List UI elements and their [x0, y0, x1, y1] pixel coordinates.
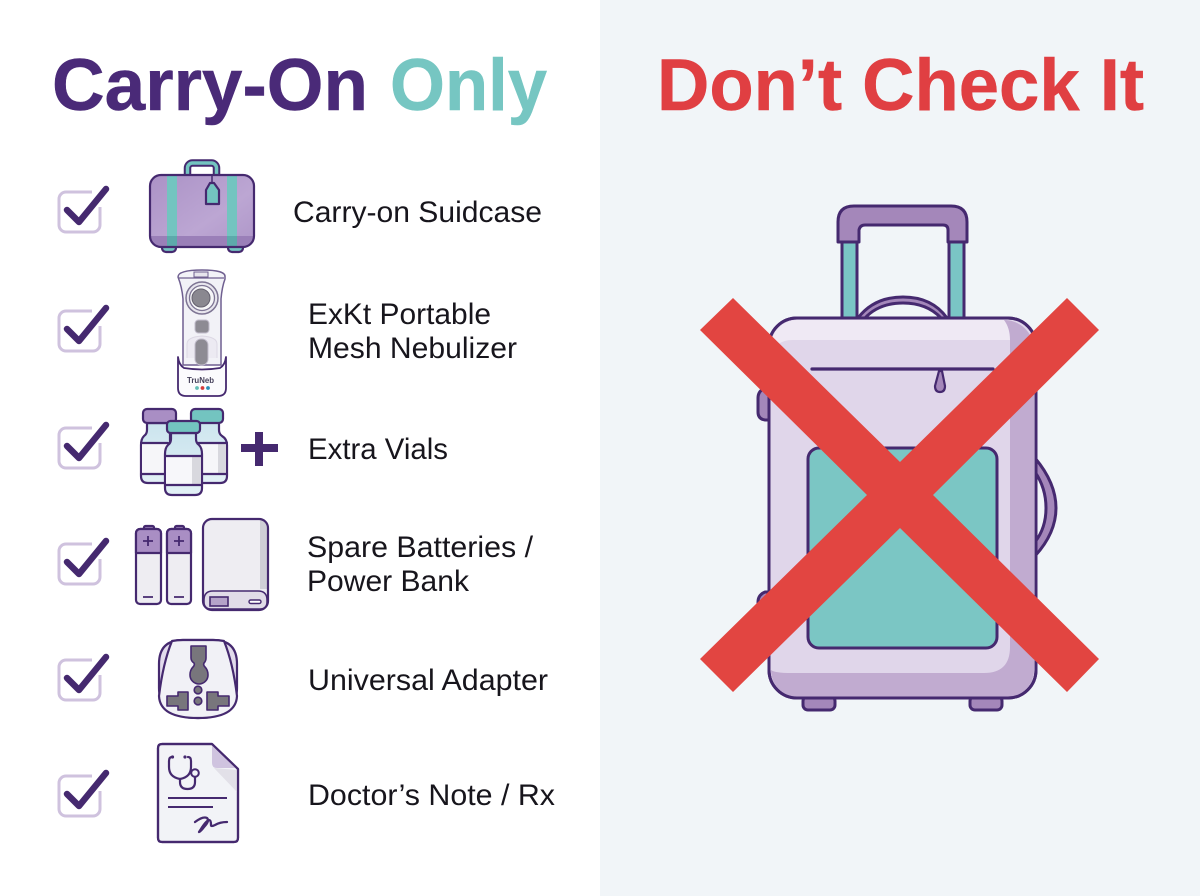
side grip [1035, 458, 1056, 556]
icon: batteries [136, 526, 191, 604]
checkbox 6 [59, 773, 106, 816]
wheels [803, 696, 835, 710]
icon: doctor's note [158, 744, 238, 842]
heading: carry-on only [52, 45, 547, 126]
label: doctor's note / rx: Doctor’s Note / Rx [308, 779, 555, 812]
label: spare batteries / power bank [307, 531, 534, 598]
icon: portable mesh nebulizer [178, 270, 226, 396]
telescoping handle [838, 206, 967, 320]
heading: don't check it: Don’t Check It [657, 45, 1144, 126]
red cross [700, 298, 1099, 692]
checkbox 4 [59, 541, 106, 584]
teal pocket [808, 448, 997, 648]
checkbox 5 [59, 657, 106, 700]
icon: suitcase [150, 163, 254, 252]
label: spare batteries / power bank: Spare Batteries / [307, 531, 534, 564]
heading: carry-on only: Carry-On [52, 45, 368, 126]
side bumpers [758, 388, 770, 420]
label: portable mesh nebulizer: Mesh Nebulizer [308, 332, 517, 365]
zipper [812, 369, 993, 392]
checkbox 3 [59, 425, 106, 468]
label: extra vials: Extra Vials [308, 433, 448, 466]
icon: universal adapter [159, 640, 237, 718]
label: carry-on suitcase: Carry-on Suidcase [293, 196, 542, 229]
icon: power bank [203, 519, 268, 610]
top carry handle [858, 297, 947, 318]
label: portable mesh nebulizer: ExKt Portable [308, 298, 491, 331]
heading: carry-on only: Only [390, 45, 547, 126]
label: universal adapter: Universal Adapter [308, 664, 548, 697]
label: spare batteries / power bank: Power Bank [307, 565, 470, 598]
suitcase body [769, 318, 1036, 698]
label: portable mesh nebulizer [308, 298, 517, 365]
icon: vials [141, 409, 227, 495]
icon: plus [241, 432, 278, 466]
icon: crossed-out suitcase [700, 206, 1099, 710]
checkbox 2 [59, 308, 106, 351]
checkbox 1 [59, 189, 106, 232]
panel: carry-on checklist [52, 45, 555, 842]
logo text: TruNeb [187, 375, 214, 385]
